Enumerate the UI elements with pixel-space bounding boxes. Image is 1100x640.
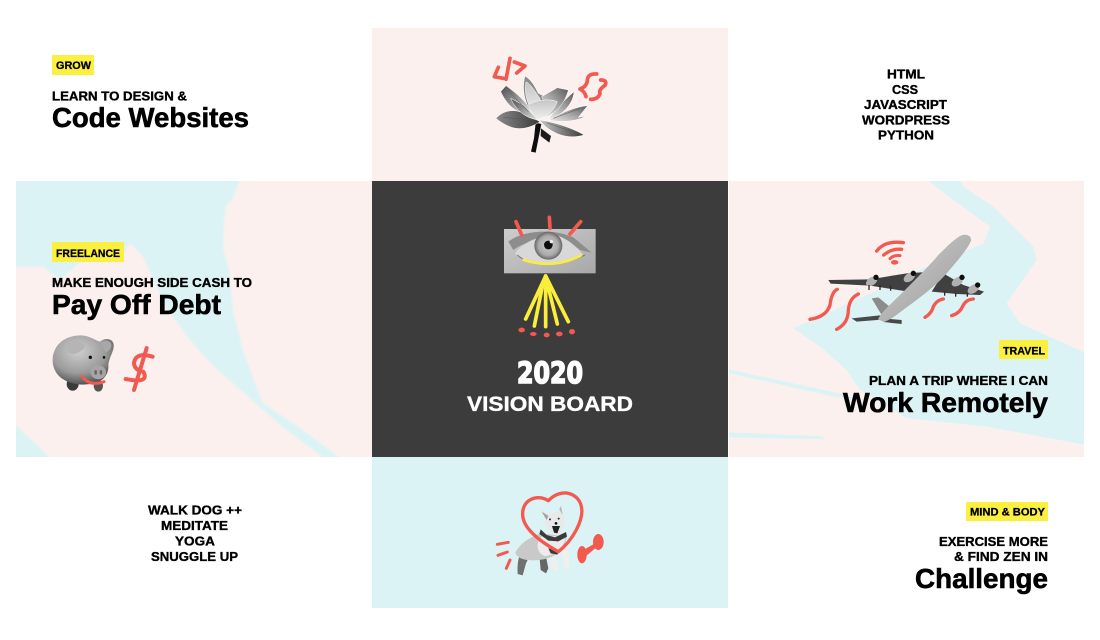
- list: wellness: WALK DOG ++: [148, 502, 242, 518]
- list: skills: WORDPRESS: [862, 112, 950, 128]
- block: mind and body: [915, 502, 1048, 594]
- icon: piggy bank and dollar: [53, 335, 153, 392]
- subheading: grow: LEARN TO DESIGN &: [52, 88, 187, 104]
- icon: wifi: [877, 242, 903, 265]
- icon: curly braces: [580, 74, 606, 99]
- tag: travel: [999, 340, 1048, 359]
- icon: dollar sign: [126, 348, 153, 390]
- list: wellness: YOGA: [175, 534, 216, 548]
- icon: red heart: [523, 493, 582, 552]
- tag: travel: TRAVEL: [1003, 346, 1045, 358]
- list: skills: [862, 66, 950, 142]
- block: grow: [52, 55, 249, 133]
- title: 2020: 2020: [517, 356, 583, 390]
- icon: airplane with wifi: [810, 235, 984, 329]
- icon: red rays: [516, 217, 581, 235]
- icon: yellow lash: [524, 256, 581, 264]
- tag: grow: [52, 55, 94, 75]
- subheading: exercise more: EXERCISE MORE: [939, 534, 1048, 549]
- list: skills: JAVASCRIPT: [864, 97, 947, 112]
- panel: left freelance background: [10, 175, 372, 460]
- subheading: travel: PLAN A TRIP WHERE I CAN: [869, 373, 1048, 388]
- list: skills: CSS: [892, 82, 918, 97]
- icon: code tag: [494, 58, 525, 79]
- tag: freelance: FREELANCE: [56, 248, 120, 260]
- heading: pay off debt: Pay Off Debt: [52, 289, 221, 320]
- heading: challenge: Challenge: [915, 563, 1048, 594]
- list: wellness: [148, 502, 242, 564]
- list: wellness: SNUGGLE UP: [151, 549, 238, 564]
- icon: red bone: [577, 534, 604, 563]
- icon: dog with heart: [497, 493, 604, 575]
- icon: motion dashes: [497, 542, 510, 568]
- list: skills: PYTHON: [878, 128, 934, 142]
- heading: code websites: Code Websites: [52, 102, 249, 133]
- panel: top centre: [372, 28, 728, 181]
- tag: mind and body: MIND & BODY: [970, 506, 1046, 518]
- icon: red smile: [82, 377, 104, 383]
- panel: centre dark: [372, 181, 728, 457]
- icon: eye with rays: [504, 217, 596, 337]
- icon: yellow fan: [526, 276, 568, 327]
- panel: bottom centre: [372, 457, 728, 608]
- tag: freelance: [52, 242, 124, 262]
- subheading: find zen: & FIND ZEN IN: [954, 549, 1048, 564]
- title: vision board: VISION BOARD: [467, 393, 633, 416]
- icon: red dots: [518, 328, 575, 337]
- icon: lotus with code marks: [494, 58, 606, 153]
- tag: grow: GROW: [56, 60, 92, 72]
- block: travel: [843, 340, 1049, 418]
- list: skills: HTML: [887, 66, 925, 82]
- subheading: freelance: MAKE ENOUGH SIDE CASH TO: [52, 275, 252, 290]
- heading: work remotely: Work Remotely: [843, 387, 1049, 418]
- list: wellness: MEDITATE: [161, 518, 228, 533]
- block: freelance: [52, 242, 252, 320]
- icon: red squiggles: [810, 289, 973, 329]
- panel: right travel background: [727, 180, 1087, 457]
